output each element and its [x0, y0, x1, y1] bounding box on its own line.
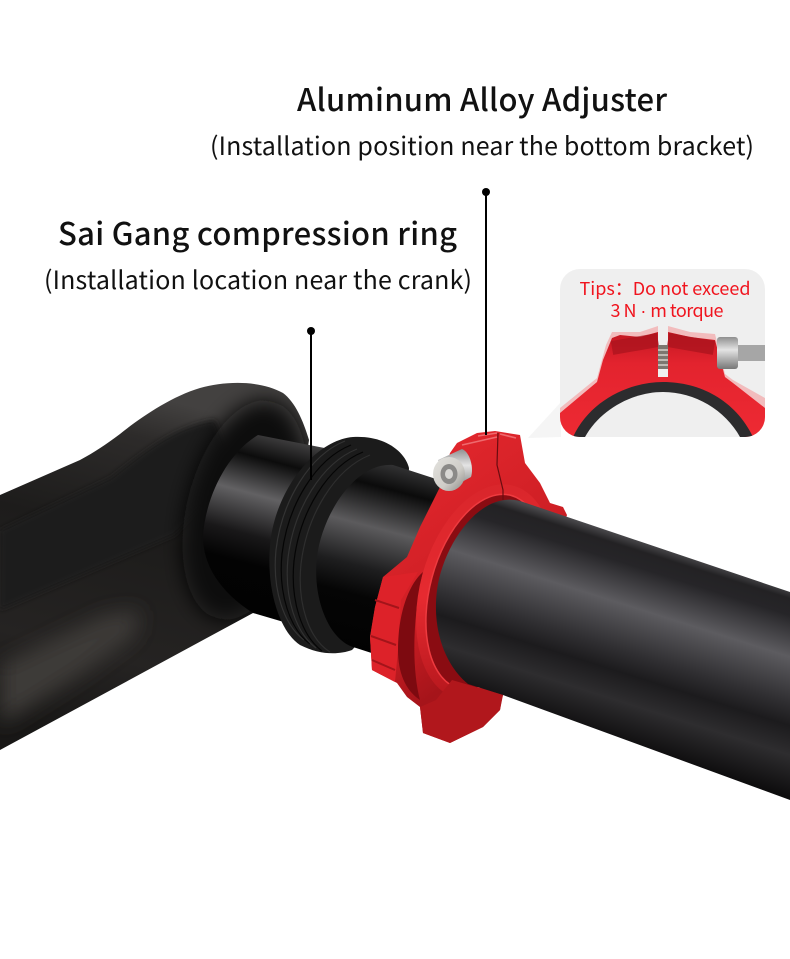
tips text: Tips：Do not exceed	[580, 275, 750, 301]
main tube	[436, 500, 790, 800]
crank arm	[0, 383, 328, 750]
aluminum alloy adjuster	[370, 431, 576, 743]
shaded lobe recess	[398, 572, 423, 700]
crank-side tube section	[203, 435, 345, 640]
compression ring	[269, 437, 409, 653]
inset bracket close-up	[560, 326, 765, 437]
middle tube section	[316, 465, 470, 672]
tips callout panel: 3 N · m torque	[610, 297, 724, 323]
heading: aluminum alloy adjuster: Aluminum Alloy Adjuster	[297, 75, 667, 120]
heading: compression ring: Sai Gang compression ring	[58, 209, 457, 254]
adjuster lower lobe	[420, 680, 503, 743]
subheading: adjuster position: (Installation position near the bottom bracket)	[210, 127, 754, 163]
knurled left lobe	[370, 572, 418, 682]
adjuster body	[370, 431, 567, 743]
face rim	[394, 469, 576, 715]
leader line: compression ring	[307, 327, 315, 480]
callout pointer	[528, 402, 561, 438]
leader line: adjuster	[482, 188, 490, 435]
infographic canvas	[0, 86, 790, 800]
subheading: ring location: (Installation location near the crank)	[44, 261, 472, 297]
tips callout panel	[560, 269, 765, 437]
clamp bolt	[433, 449, 472, 491]
split line	[497, 433, 503, 500]
top knurl	[462, 433, 516, 445]
